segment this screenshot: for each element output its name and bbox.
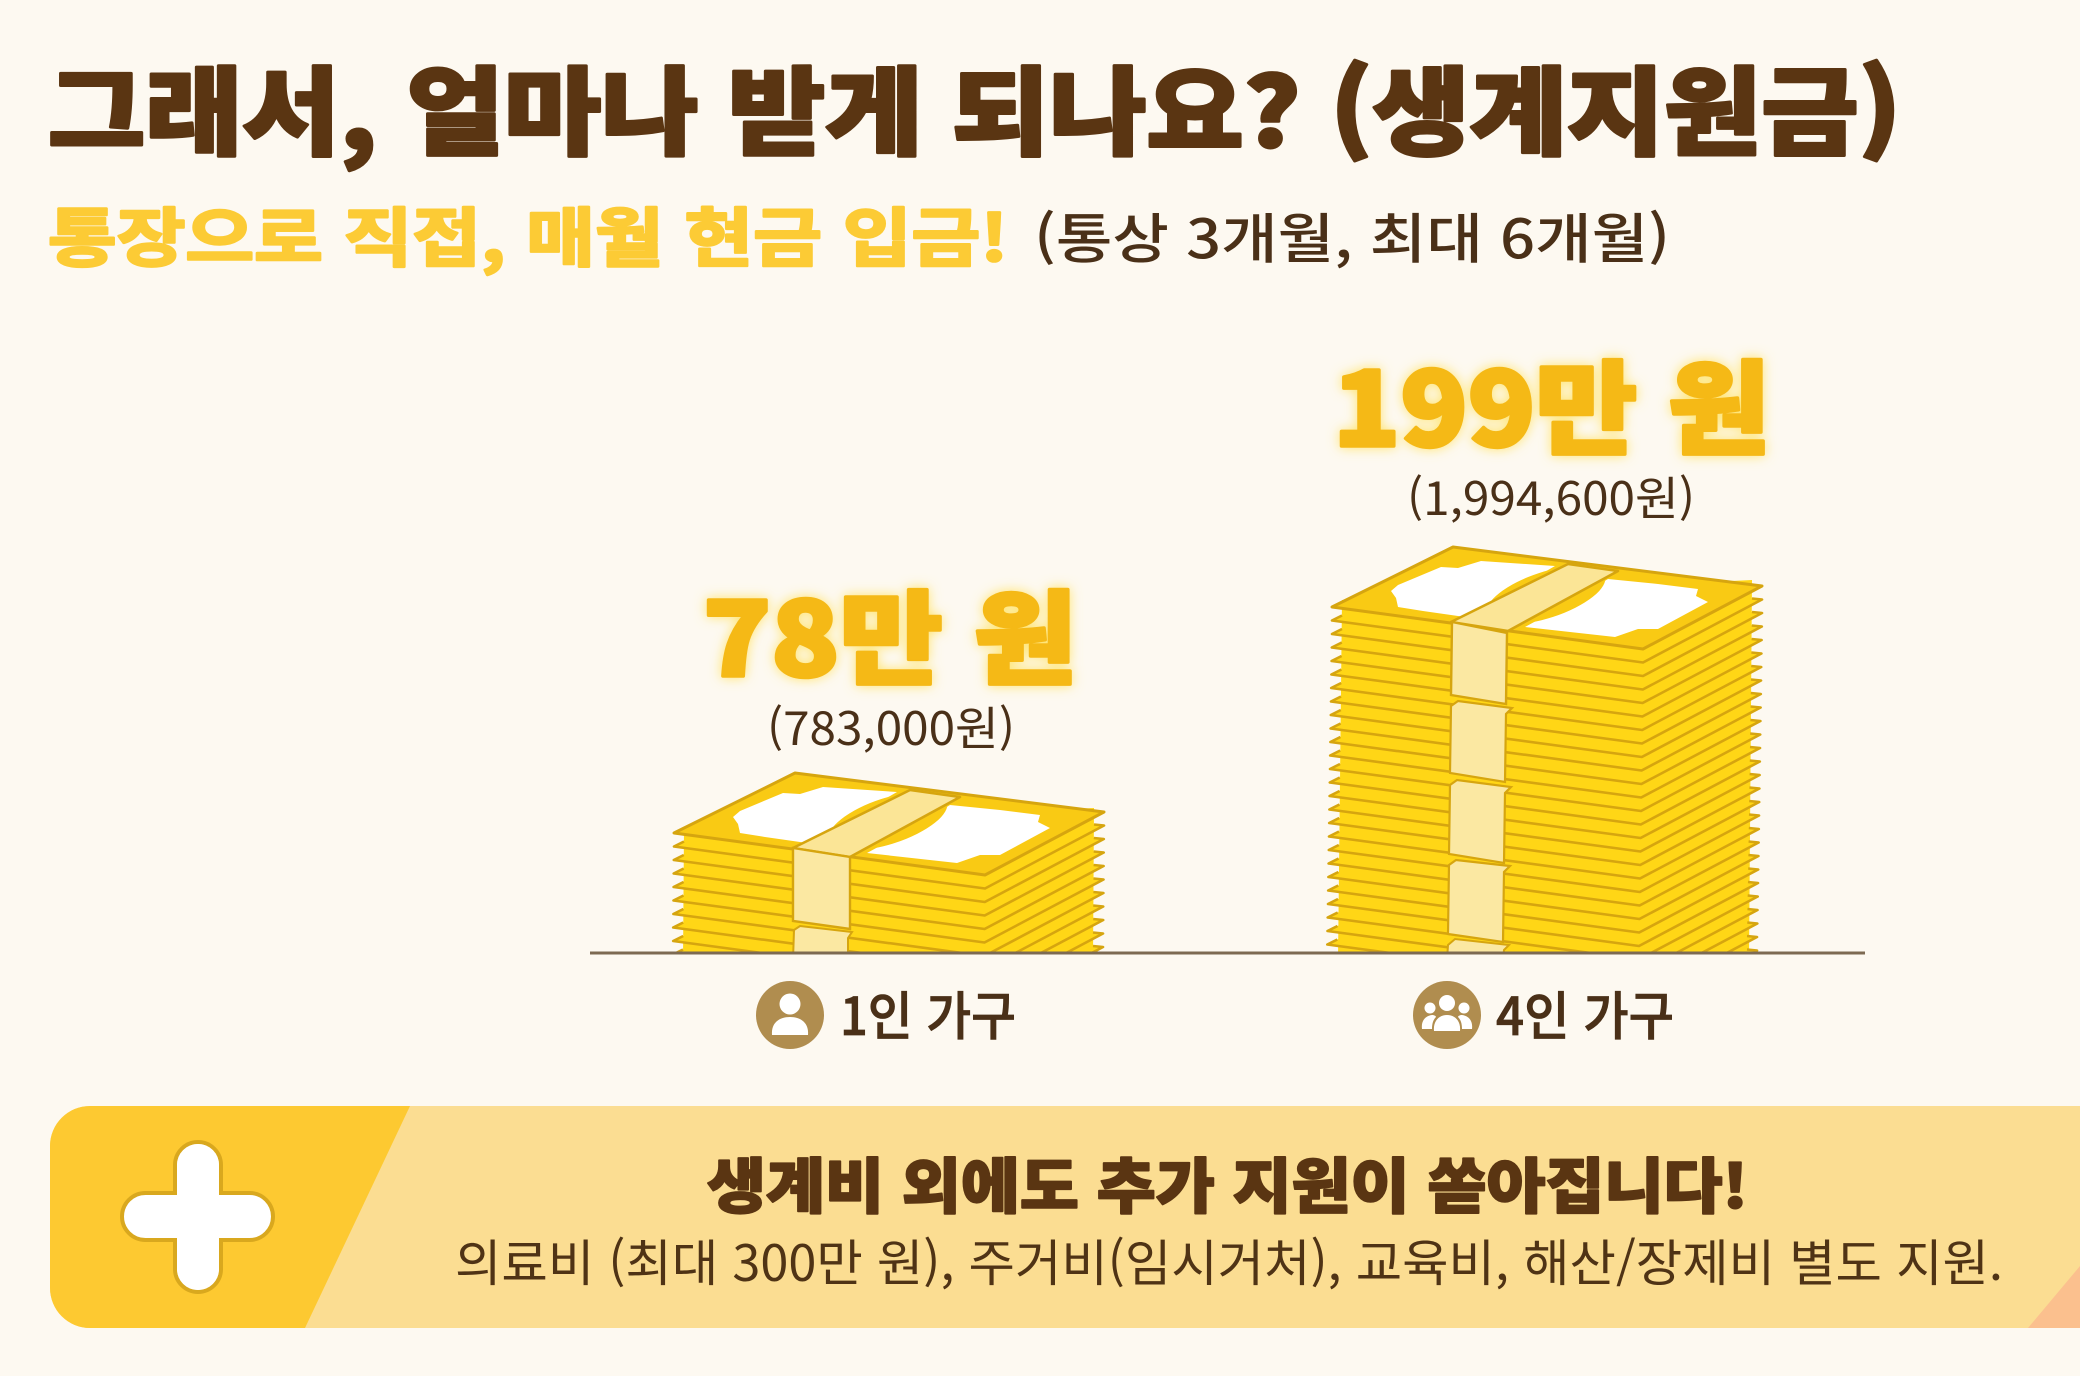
subtitle highlight: 통장으로 직접, 매월 현금 입금! [48, 188, 1008, 280]
panel: additional support banner [50, 1106, 2080, 1328]
title: 그래서, 얼마나 받게 되나요? (생계지원금) [48, 36, 1901, 175]
subtitle [48, 188, 1670, 280]
icon: single person [756, 981, 824, 1049]
subtitle note: (통상 3개월, 최대 6개월) [1034, 195, 1670, 274]
money stack: 1인 가구 [672, 772, 1106, 952]
category: 4인 가구 [1413, 975, 1674, 1050]
exact amount 783,000원: (783,000원) [767, 693, 1015, 759]
amount: 4인 가구 [1333, 329, 1770, 529]
banner body text: 의료비 (최대 300만 원), 주거비(임시거처), 교육비, 해산/장제비 별도 지원. [455, 1224, 2003, 1296]
label: 1인 가구 [840, 975, 1016, 1050]
icon: plus [122, 1142, 273, 1292]
icon: group of people [1413, 981, 1481, 1049]
amount 78만 원: 78만 원 [703, 559, 1077, 706]
banner background [50, 1106, 2080, 1328]
amount 199만 원: 199만 원 [1333, 329, 1770, 476]
banner heading: 생계비 외에도 추가 지원이 쏟아집니다! [707, 1139, 1748, 1226]
exact amount 1,994,600원: (1,994,600원) [1407, 463, 1695, 529]
amount: 1인 가구 [703, 559, 1077, 759]
label: 4인 가구 [1496, 975, 1674, 1050]
money stack: 4인 가구 [1326, 546, 1764, 952]
category: 1인 가구 [756, 975, 1016, 1050]
baseline axis [590, 952, 1865, 954]
